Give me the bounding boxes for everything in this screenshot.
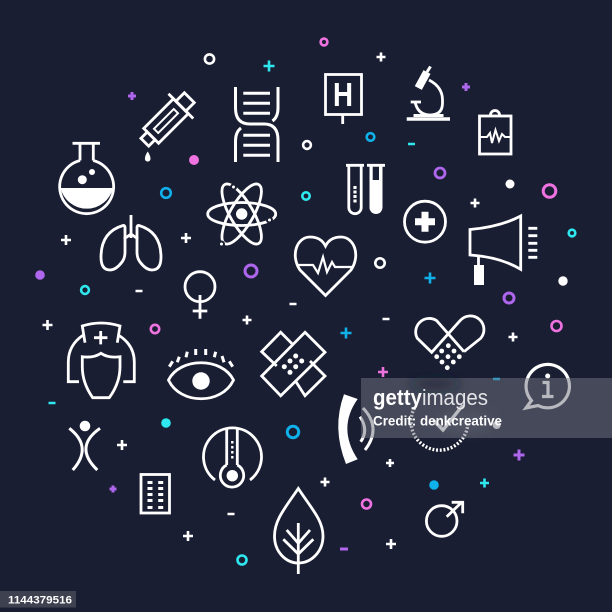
icon: dotted circle with check mark	[411, 405, 501, 450]
icon: crossed bandage	[262, 332, 325, 396]
icon: person with raised arms	[69, 421, 100, 470]
icon: hospital sign: H	[333, 76, 353, 113]
icon: hospital sign	[326, 74, 362, 124]
icon: info speech bubble	[526, 364, 569, 408]
icon: leaf	[274, 488, 323, 574]
watermark credit text: Credit: denkcreative	[373, 414, 502, 428]
icon: telephone handset	[338, 394, 373, 464]
icon: test tubes	[346, 165, 385, 214]
icon: heart-shaped capsules	[416, 316, 484, 370]
icon: heart with pulse	[295, 237, 356, 296]
icon: clipboard with ECG	[480, 110, 511, 154]
icon: syringe	[132, 85, 202, 162]
icon: thermometer	[204, 428, 262, 487]
image id tag: 1144379516	[8, 594, 72, 606]
icon: DNA helix	[236, 87, 278, 162]
watermark logo text: gettyimages	[373, 385, 488, 410]
icon: male symbol	[426, 502, 463, 536]
icon: female symbol	[185, 272, 215, 319]
image id tag	[0, 591, 76, 608]
icons	[60, 66, 569, 574]
icon: flask	[60, 143, 114, 214]
watermark band	[361, 377, 612, 438]
icon: eye	[168, 349, 234, 399]
icon: megaphone	[470, 216, 537, 285]
icon: medical cross in circle	[404, 201, 446, 242]
icon: nurse	[68, 323, 134, 398]
icon: atom	[208, 179, 276, 249]
icon: blister pill pack	[141, 474, 170, 513]
icon: microscope	[407, 66, 450, 119]
decorative confetti: rings, dots, plus and minus marks	[35, 39, 575, 565]
icon: lungs	[101, 215, 161, 270]
